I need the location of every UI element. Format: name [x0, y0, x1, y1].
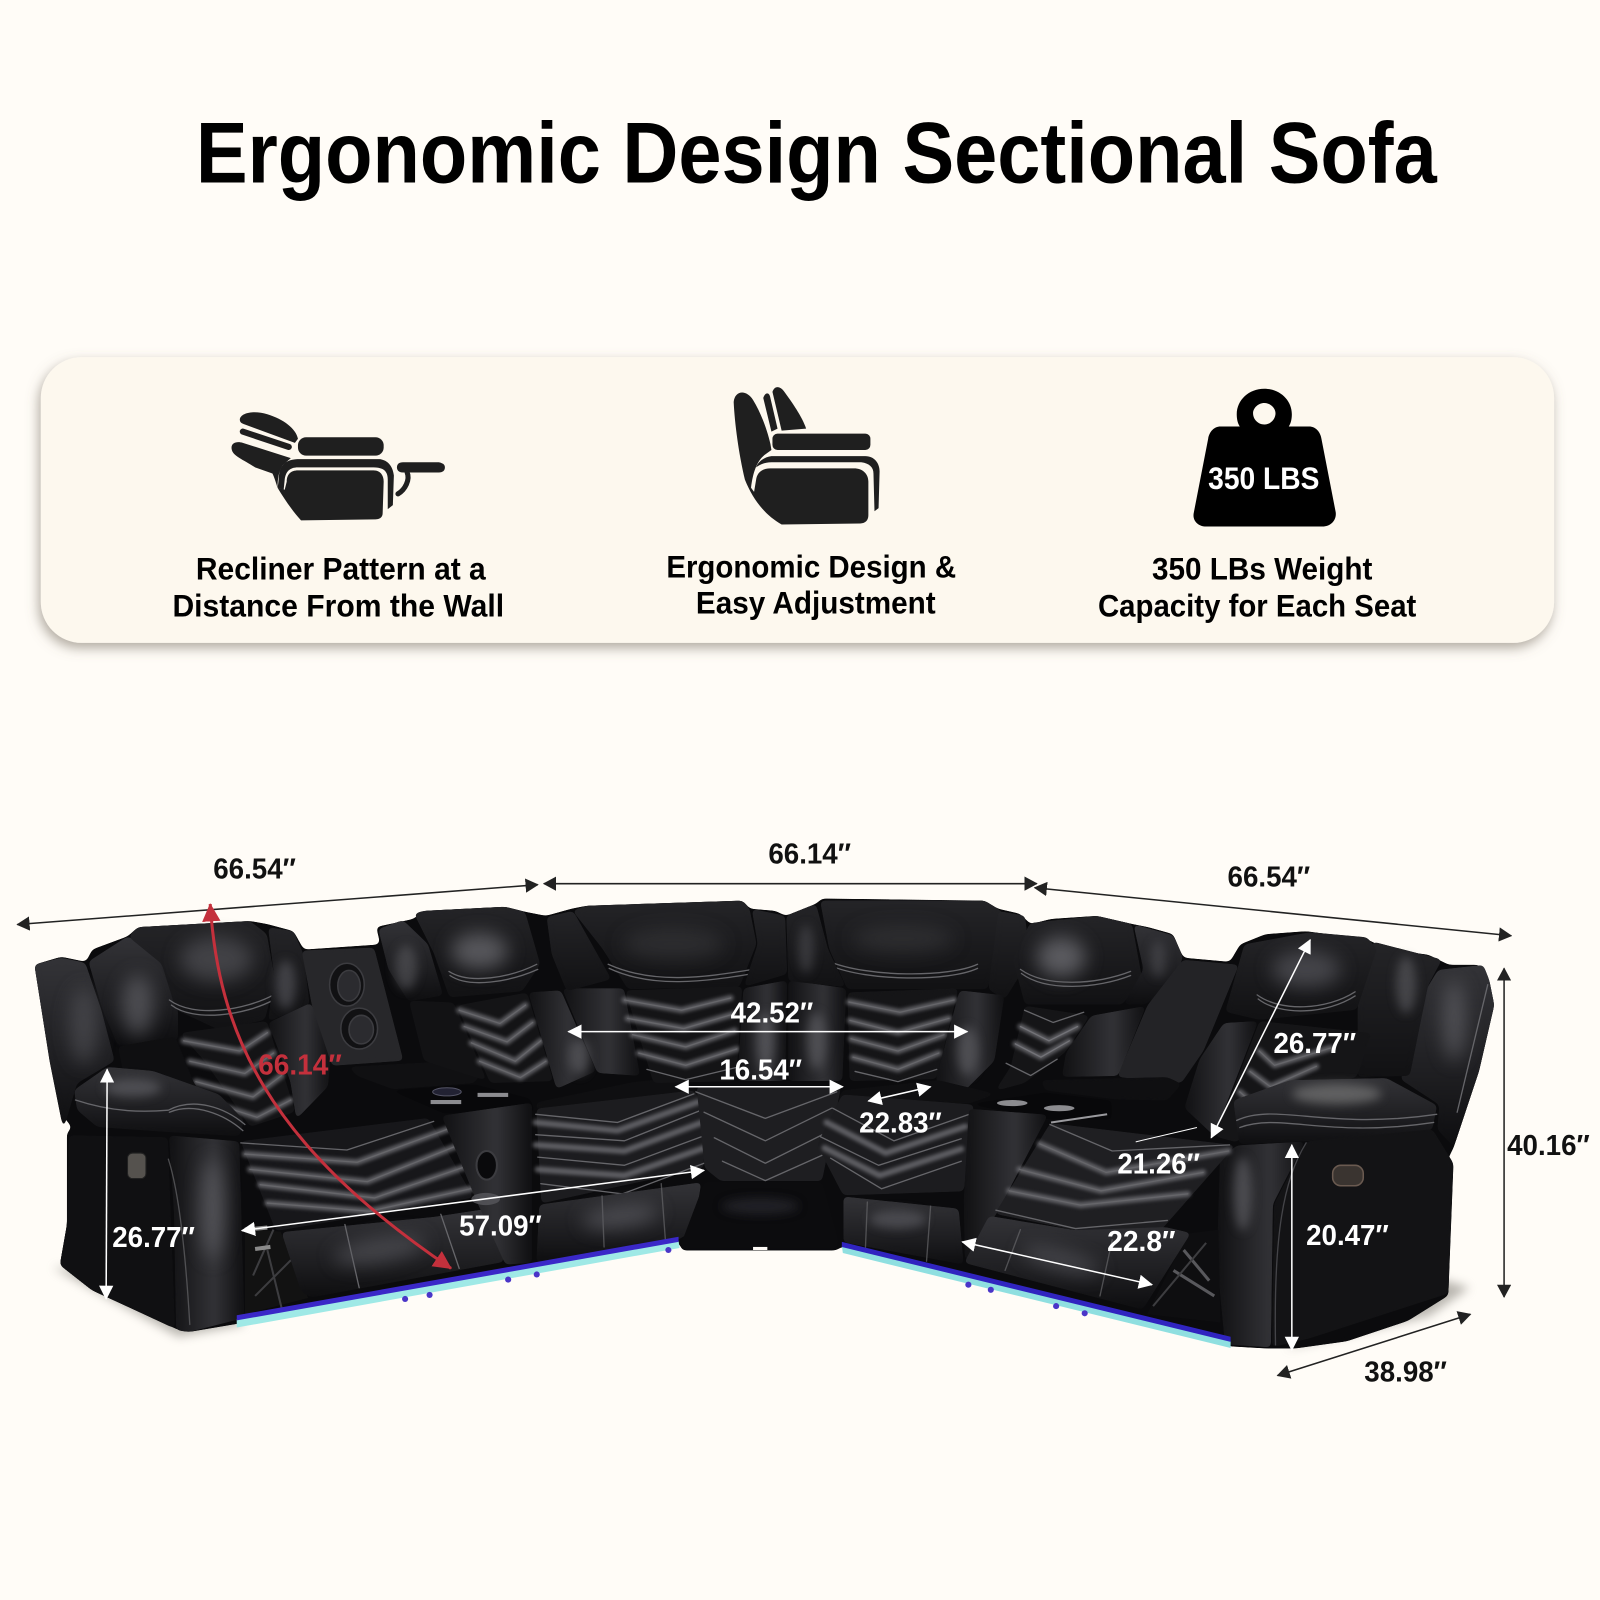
- text: ergonomic design: [666, 549, 956, 620]
- dimension: red recline arc: 66.14″: [258, 1049, 342, 1081]
- head pad: [1224, 932, 1378, 1020]
- dimension: footrest width: 22.8″: [1107, 1226, 1176, 1258]
- mechanism: [1147, 1230, 1220, 1322]
- back seat 3 with right console: [963, 915, 1240, 1265]
- right head bolster: [1357, 941, 1443, 1078]
- cushion bolsters: [528, 990, 597, 1090]
- dimension: seat height left: 26.77″: [112, 1222, 195, 1254]
- text: ergonomic design: Ergonomic Design &: [666, 549, 956, 585]
- dimension: recliner back height: 26.77″: [1273, 1028, 1356, 1060]
- back side bolsters: [117, 1036, 204, 1097]
- dimension: right width: [1035, 862, 1511, 936]
- LED strip: right: [842, 1242, 1231, 1348]
- side panel: [1271, 1129, 1454, 1348]
- mechanism: [245, 1229, 308, 1314]
- text: weight capacity: 350 LBs Weight: [1152, 551, 1373, 587]
- text: weight capacity: Capacity for Each Seat: [1098, 587, 1417, 623]
- title: Ergonomic Design Sectional Sofa: [196, 105, 1437, 202]
- dimension: right width: 66.54″: [1228, 862, 1310, 894]
- dimension: back inner width: 42.52″: [731, 997, 814, 1029]
- dimension: seat height right: 20.47″: [1306, 1220, 1389, 1252]
- center-left back: [546, 900, 847, 1084]
- dimension: seat depth: 22.83″: [859, 1108, 942, 1140]
- sofa illustration: [34, 898, 1495, 1349]
- icon: reclined chair with footrest: [232, 412, 445, 520]
- left side panel: [59, 1135, 176, 1330]
- dimension: center width: 66.14″: [768, 838, 851, 870]
- icon: weight 350 lbs: [1193, 389, 1336, 527]
- back chevron panel: [179, 1020, 296, 1128]
- icon: weight 350 lbs: 350 LBS: [1208, 460, 1319, 496]
- text: recliner pattern: Recliner Pattern at a: [196, 551, 486, 587]
- dimension: left width: 66.54″: [213, 854, 296, 886]
- icon: upright ergonomic chair: [734, 387, 880, 524]
- left wing: [34, 957, 115, 1133]
- text: ergonomic design: Easy Adjustment: [696, 584, 936, 620]
- button: [1333, 1165, 1363, 1186]
- dimension: total height: 40.16″: [1507, 1130, 1590, 1162]
- LED strip: left: [237, 1237, 680, 1328]
- footrest lower: [963, 1215, 1192, 1310]
- dimension: red recline arc: [210, 904, 451, 1268]
- dimension: footrest width: [962, 1226, 1176, 1285]
- dimension: corner seat width: 16.54″: [719, 1055, 802, 1087]
- panel: features: [41, 357, 1554, 643]
- dimension: seat depth: [859, 1087, 942, 1140]
- back seat 2: [378, 906, 706, 1263]
- seat 2 top: [536, 1077, 704, 1110]
- right recliner: [963, 932, 1495, 1348]
- dimension: extended length: [242, 1170, 704, 1243]
- footrest upper chevrons: [240, 1117, 474, 1232]
- text: recliner pattern: Distance From the Wall: [172, 587, 504, 623]
- dimension: recliner seat width: 21.26″: [1117, 1148, 1200, 1180]
- left console with speakers: [301, 947, 536, 1265]
- headrest: [128, 920, 276, 1031]
- dimension: depth: [1278, 1314, 1470, 1389]
- center corner seat: [682, 1086, 842, 1250]
- back chevrons: [1214, 1020, 1372, 1143]
- seat right chevron front: [837, 1080, 998, 1104]
- side front: [1216, 1141, 1306, 1348]
- footrest upper: [994, 1122, 1237, 1231]
- left armrest: [73, 1066, 245, 1137]
- recliner button: [128, 1153, 146, 1179]
- seat 2 chevron front: [536, 1090, 706, 1204]
- text: recliner pattern: [172, 551, 504, 623]
- dimension: extended length: 57.09″: [459, 1211, 542, 1243]
- dimension: depth: 38.98″: [1364, 1357, 1447, 1389]
- footrest lower: [281, 1208, 505, 1298]
- left recliner: [34, 920, 505, 1333]
- dimension: recliner back height: [1211, 940, 1356, 1138]
- wing: [1400, 964, 1495, 1148]
- text: weight capacity: [1098, 551, 1417, 623]
- sofa silhouette base: [34, 898, 1495, 1349]
- head bolster: [88, 936, 179, 1046]
- floor shadows: [53, 1267, 1469, 1349]
- right arm: [1233, 1078, 1438, 1145]
- center-right back: [786, 900, 1031, 1265]
- dimension: left width: [17, 854, 538, 924]
- dimension: recliner seat width: [1117, 1128, 1200, 1180]
